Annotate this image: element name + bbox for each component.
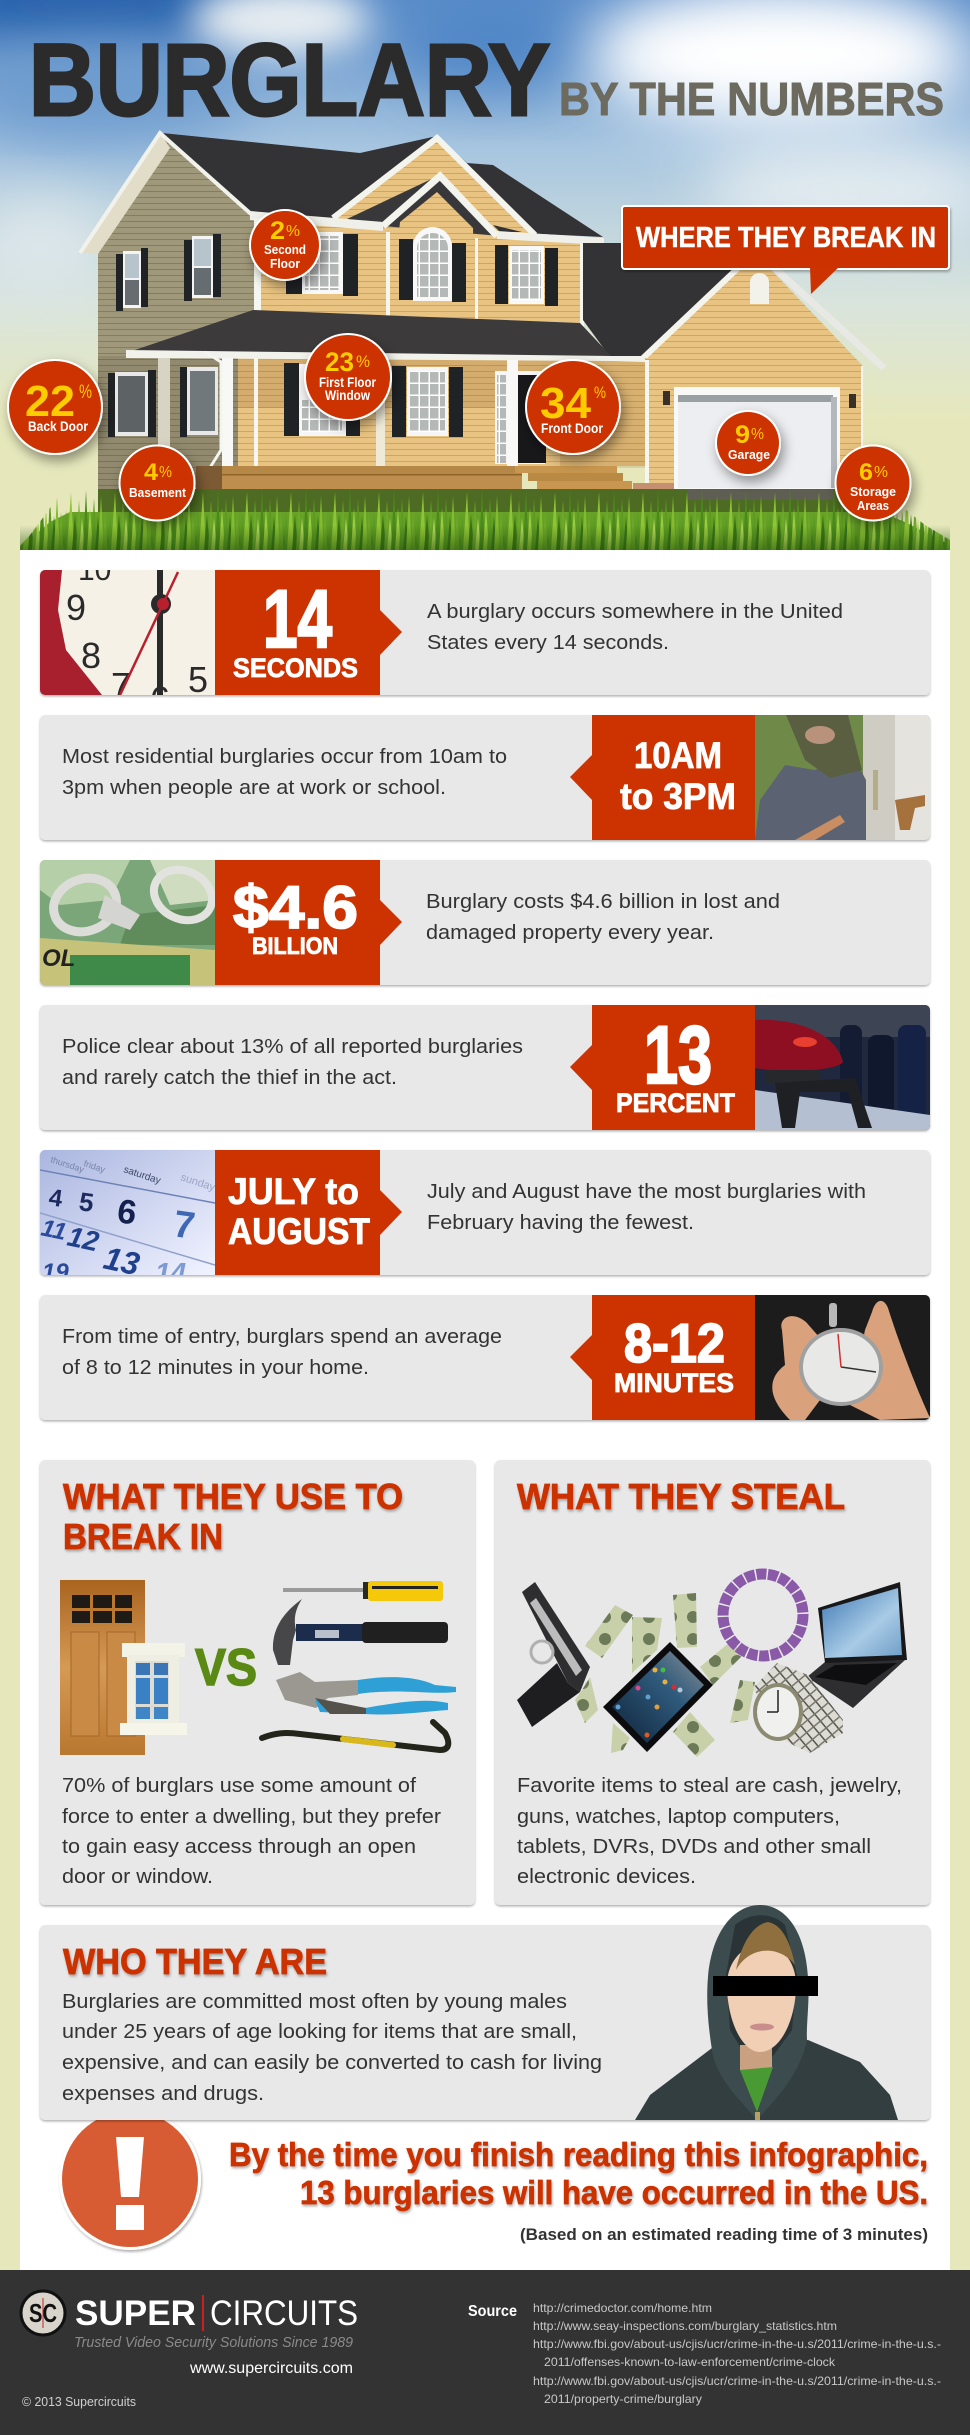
stat block: 14 seconds — [215, 570, 402, 695]
badge: 22% back door — [7, 359, 103, 455]
text block: July and August have the most burglaries with — [427, 1181, 866, 1203]
badge: 6% storage areas: % — [874, 464, 888, 481]
icon: pliers — [276, 1672, 456, 1715]
panel: what they use to break in — [40, 1460, 475, 1905]
panel: who they are — [40, 1905, 930, 2120]
text block — [517, 1775, 902, 1888]
photo: clock: 7 — [111, 665, 131, 706]
heading — [63, 1476, 403, 1557]
logo: supercircuits: SUPER — [75, 2294, 196, 2333]
text block: door or window. — [62, 1866, 213, 1888]
text block: Most residential burglaries occur from 10am to — [62, 746, 507, 768]
callout: reading time message: 13 burglaries will have occurred in the US. — [300, 2174, 928, 2211]
badge: 2% second floor: Floor — [270, 256, 300, 271]
text block: to gain easy access through an open — [62, 1836, 416, 1858]
badge: 6% storage areas — [834, 444, 912, 522]
stat block: 4.6 billion — [215, 860, 402, 985]
stat block: july to august: AUGUST — [228, 1211, 370, 1252]
text block — [62, 1326, 502, 1379]
photo: stopwatch in hand — [755, 1295, 930, 1420]
badge: 4% basement: 4 — [144, 459, 159, 486]
text block: and rarely catch the thief in the act. — [62, 1067, 397, 1089]
text block — [62, 1991, 602, 2105]
stat block: 14 seconds: 14 — [263, 574, 332, 665]
stat block: 8-12 minutes: MINUTES — [614, 1368, 734, 1398]
sources: Source — [468, 2303, 517, 2320]
photo: clock: 9 — [66, 587, 86, 628]
subtitle: by the numbers: BY THE NUMBERS — [559, 73, 944, 125]
stat block: 13 percent — [570, 1005, 755, 1130]
text block — [62, 1775, 441, 1888]
callout: reading time message: By the time you finish reading this infographic, — [229, 2136, 928, 2173]
photo: calendar: 14 — [155, 1257, 187, 1288]
photo: clock — [40, 570, 215, 695]
photo: calendar: 7 — [171, 1203, 198, 1248]
text block — [427, 1181, 866, 1234]
badge: 4% basement — [118, 444, 196, 522]
badge: 9% garage: % — [751, 426, 764, 443]
photo: calendar — [40, 1150, 215, 1275]
callout: where they break in — [622, 206, 949, 294]
text block — [62, 746, 507, 799]
text block: February having the fewest. — [427, 1212, 694, 1234]
exclamation icon — [59, 2108, 201, 2250]
sources: http://www.seay-inspections.com/burglary_statistics.htm — [533, 2319, 837, 2333]
stat block: 10am to 3pm — [570, 715, 755, 840]
sources: 2011/offenses-known-to-law-enforcement/crime-clock — [544, 2355, 836, 2369]
badge: 23% first floor window: 23 — [325, 347, 354, 377]
panel: what they steal — [495, 1460, 930, 1905]
stat block: july to august: JULY to — [228, 1171, 359, 1212]
badge: 6% storage areas: Storage — [850, 484, 896, 499]
photo: handcuffs on cash — [40, 860, 220, 985]
sky with clouds — [0, 0, 970, 560]
text block: force to enter a dwelling, but they prefer — [62, 1806, 441, 1828]
garage door — [663, 387, 856, 490]
text block: expenses and drugs. — [62, 2083, 264, 2105]
text block — [62, 1036, 523, 1089]
text block: From time of entry, burglars spend an average — [62, 1326, 502, 1348]
sources: 2011/property-crime/burglary — [544, 2392, 702, 2406]
panel: july to august — [39, 1150, 930, 1288]
footer — [0, 2270, 970, 2435]
upper windows — [116, 227, 558, 311]
photo: calendar: 5 — [77, 1186, 96, 1218]
badge: 2% second floor: 2 — [270, 217, 285, 245]
title — [29, 23, 944, 137]
badge: 22% back door: Back Door — [28, 418, 88, 434]
sources: http://www.fbi.gov/about-us/cjis/ucr/crime-in-the-u.s/2011/crime-in-the-u.s.- — [533, 2374, 941, 2388]
panel: 4.6 billion — [40, 860, 930, 985]
stat block: 13 percent: 13 — [644, 1010, 712, 1101]
text block: electronic devices. — [517, 1866, 696, 1888]
title: BURGLARY: BURGLARY — [29, 23, 550, 137]
photo: masked burglar — [755, 715, 930, 840]
badge: 4% basement: Basement — [129, 485, 187, 500]
vs label: VS — [195, 1639, 257, 1697]
panel: 8-12 minutes — [40, 1295, 930, 1420]
text block: Burglaries are committed most often by young males — [62, 1991, 567, 2013]
website: www.supercircuits.com — [189, 2360, 353, 2377]
logo: supercircuits: SC — [29, 2298, 57, 2328]
badge: 6% storage areas: Areas — [857, 498, 889, 513]
icon: white window — [120, 1643, 187, 1735]
text block — [426, 891, 780, 944]
badge: 9% garage — [715, 410, 781, 476]
logo: supercircuits: CIRCUITS — [210, 2294, 358, 2333]
tagline: Trusted Video Security Solutions Since 1989 — [74, 2334, 354, 2351]
badge: 23% first floor window: First Floor — [319, 375, 377, 390]
deck and steps — [196, 466, 674, 491]
stat block: 4.6 billion: BILLION — [252, 933, 338, 960]
icon: wooden door — [60, 1580, 145, 1755]
photo: clock: 8 — [81, 635, 101, 676]
lawn — [98, 489, 873, 534]
badge: 2% second floor: % — [286, 223, 300, 240]
badge: 2% second floor: Second — [264, 242, 306, 257]
text block — [427, 601, 843, 654]
badge: 23% first floor window: % — [356, 352, 370, 371]
stat block: 10am to 3pm: to 3PM — [620, 776, 736, 817]
sources: http://www.fbi.gov/about-us/cjis/ucr/crime-in-the-u.s/2011/crime-in-the-u.s.- — [533, 2337, 941, 2351]
callout: reading time message: (Based on an estimated reading time of 3 minutes) — [520, 2225, 928, 2244]
heading: WHAT THEY USE TO — [63, 1476, 403, 1517]
stat block: july to august — [215, 1150, 402, 1275]
photo: calendar: 11 — [39, 1214, 69, 1246]
black privacy bar — [713, 1976, 818, 1996]
photo: calendar: saturday — [122, 1164, 162, 1187]
icon: bracelet — [723, 1574, 803, 1656]
stat block: 13 percent: PERCENT — [616, 1088, 735, 1118]
text block: 70% of burglars use some amount of — [62, 1775, 416, 1797]
stat block: 4.6 billion: $4.6 — [233, 874, 358, 941]
stat block: 8-12 minutes — [570, 1295, 755, 1420]
icon: wristwatch — [753, 1663, 843, 1753]
badge: 2% second floor — [249, 209, 321, 281]
photo: calendar: 19 — [42, 1259, 69, 1286]
heading: BREAK IN — [63, 1516, 223, 1557]
badge: 23% first floor window — [304, 333, 392, 421]
badge: 22% back door: 22 — [25, 377, 75, 426]
photo: police light — [755, 1005, 930, 1130]
text block: States every 14 seconds. — [427, 632, 669, 654]
photo: clock: 5 — [188, 659, 208, 700]
heading: WHO THEY ARE — [63, 1941, 327, 1982]
text block: A burglary occurs somewhere in the United — [427, 601, 843, 623]
callout: reading time message — [229, 2136, 928, 2244]
photo: hooded young man — [635, 1905, 898, 2120]
photo: calendar: 4 — [47, 1184, 65, 1213]
badge: 34% front door — [525, 359, 621, 455]
logo: supercircuits — [21, 2291, 358, 2335]
icon: handgun — [517, 1582, 590, 1727]
photo: clock: 10 — [78, 554, 111, 587]
text block: damaged property every year. — [426, 922, 714, 944]
badge: 9% garage: 9 — [735, 421, 750, 449]
text block: under 25 years of age looking for items that are small, — [62, 2021, 577, 2043]
porch columns and downspout — [158, 352, 518, 490]
badge: 6% storage areas: 6 — [859, 459, 873, 486]
photo: calendar: 13 — [101, 1240, 143, 1282]
badge: 23% first floor window: Window — [325, 388, 370, 403]
text block: 3pm when people are at work or school. — [62, 777, 446, 799]
badge: 4% basement: % — [159, 464, 172, 481]
text block: expensive, and can easily be converted to cash for living — [62, 2052, 602, 2074]
text block: of 8 to 12 minutes in your home. — [62, 1357, 369, 1379]
icon: tablet — [603, 1642, 713, 1752]
icon: crowbar — [262, 1722, 448, 1750]
photo: calendar: sunday — [179, 1171, 217, 1194]
stat block: 14 seconds: SECONDS — [233, 653, 358, 683]
icon: hammer — [273, 1599, 448, 1665]
photo: calendar: friday — [82, 1158, 107, 1175]
sources: http://crimedoctor.com/home.htm — [533, 2301, 712, 2315]
sources — [468, 2301, 941, 2406]
text block: Police clear about 13% of all reported burglaries — [62, 1036, 523, 1058]
lower windows — [108, 363, 546, 464]
callout: where they break in: WHERE THEY BREAK IN — [636, 222, 936, 254]
stat block: 8-12 minutes: 8-12 — [624, 1312, 725, 1374]
text block: Burglary costs $4.6 billion in lost and — [426, 891, 780, 913]
text block: Favorite items to steal are cash, jewelry, — [517, 1775, 902, 1797]
copyright: © 2013 Supercircuits — [22, 2394, 136, 2409]
panel: 13 percent — [40, 1005, 930, 1130]
text block: guns, watches, laptop computers, — [517, 1806, 840, 1828]
panel: 14 seconds — [38, 570, 932, 698]
stat block: 10am to 3pm: 10AM — [634, 735, 722, 776]
white content column — [20, 550, 950, 2270]
badge: 22% back door: % — [79, 382, 92, 403]
photo: handcuffs on cash: OL — [42, 945, 75, 972]
photo: calendar: thursday — [49, 1154, 86, 1175]
photo: calendar: 12 — [65, 1221, 102, 1257]
badge: 34% front door: % — [594, 383, 606, 402]
badge: 9% garage: Garage — [728, 447, 770, 462]
icon: laptop — [807, 1582, 907, 1708]
house illustration — [80, 133, 884, 492]
badge: 34% front door: Front Door — [541, 420, 603, 436]
icon: cash — [575, 1593, 755, 1757]
icon: screwdriver — [283, 1581, 443, 1601]
photo: calendar: 6 — [115, 1192, 139, 1233]
grass strip — [20, 488, 950, 550]
text block: tablets, DVRs, DVDs and other small — [517, 1836, 871, 1858]
panel: 10am to 3pm — [40, 715, 930, 840]
photo: clock: 6 — [150, 679, 170, 720]
badge: 34% front door: 34 — [540, 379, 592, 428]
heading: WHAT THEY STEAL — [517, 1476, 845, 1517]
